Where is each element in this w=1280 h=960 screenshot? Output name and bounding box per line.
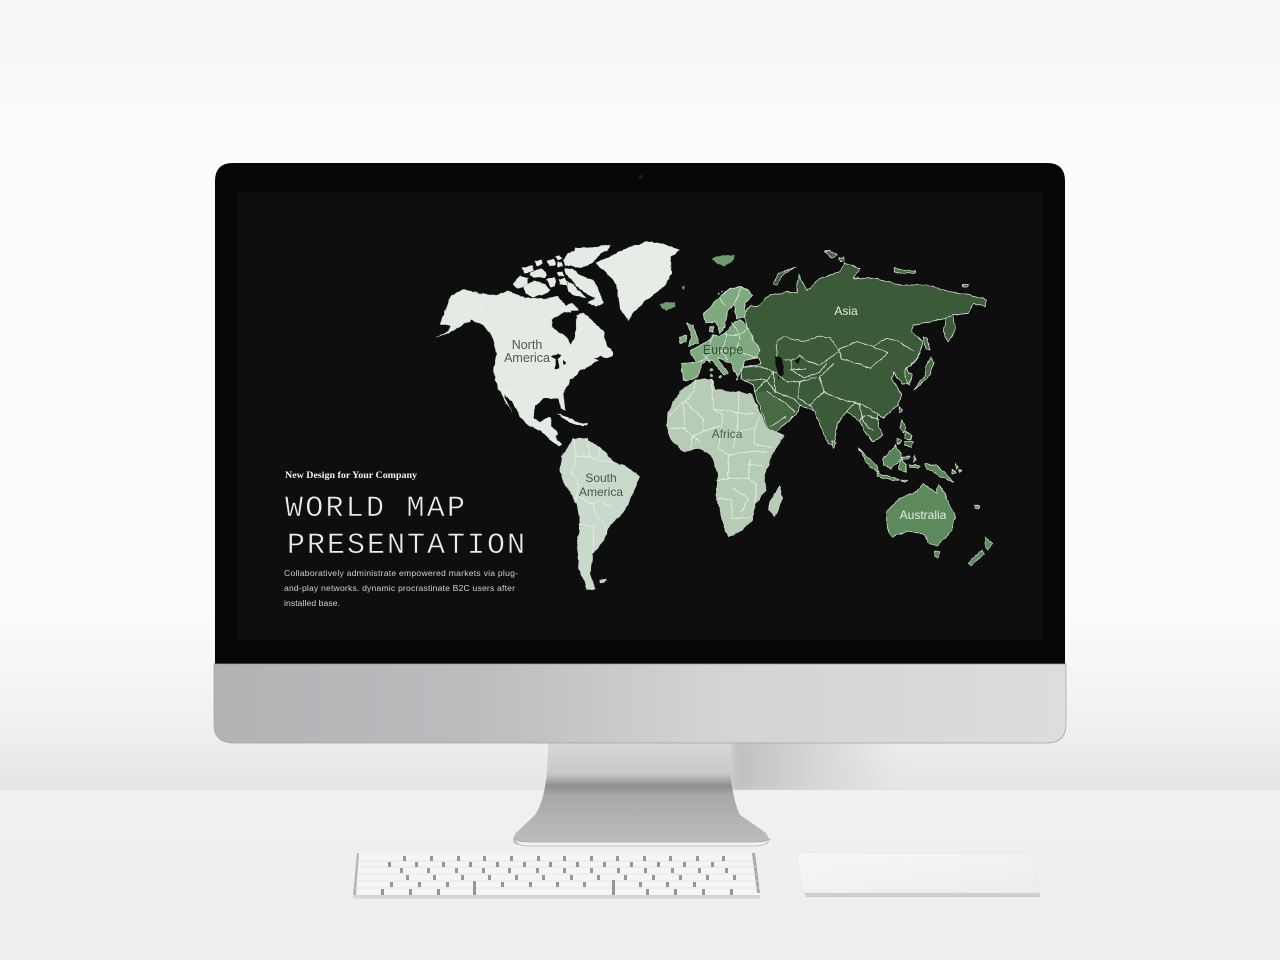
Greenland [595,242,680,321]
Arabian peninsula tint [756,392,796,434]
keyboard key gaps [381,856,736,895]
description text: Collaboratively administrate empowered markets via plug- [284,568,518,578]
Caribbean islands [556,414,587,425]
Asia borders [742,337,918,432]
Asia [741,250,987,448]
trackpad [797,853,1040,897]
monitor chin [214,664,1066,743]
subtitle: New Design for Your Company [285,471,417,481]
monitor shadow on wall [729,743,868,790]
map label: North America: North [512,338,542,352]
description text: and-play networks. dynamic procrastinate B2C users after [284,583,515,593]
map label: America (North): America [504,351,550,365]
map label: Europe: Europe [703,343,743,357]
title line 1: WORLD MAP [285,492,465,526]
description text [284,568,518,608]
South America [559,438,640,589]
monitor stand [513,743,770,846]
North America borders [480,295,557,403]
screen content area [237,192,1043,640]
Africa, Eurasia and Oceania [660,250,993,566]
Caspian and Aral seas [774,357,800,407]
Canadian islands [513,245,612,357]
camera [639,175,643,179]
keyboard [353,853,760,898]
map label: Australia: Australia [900,508,947,522]
description text: installed base. [284,598,340,608]
North America [436,245,612,447]
Great Lakes and Gulf of California [505,353,566,414]
Asian islands [773,250,967,448]
map label: Africa: Africa [712,427,743,441]
background: desk [0,790,1280,960]
Australia [887,483,993,566]
Arctic islands [660,255,735,311]
Europe [680,287,760,380]
Southeast Asia and New Guinea [858,445,962,482]
Africa [667,379,784,537]
monitor body screen bezel [215,163,1065,664]
map label: South America: South [585,471,617,485]
title line 2: PRESENTATION [287,529,525,563]
map label: America (South): America [579,485,623,499]
map label: Asia: Asia [834,304,858,318]
Americas and Greenland [436,242,680,589]
monitor [214,163,1066,743]
world map [436,242,993,589]
